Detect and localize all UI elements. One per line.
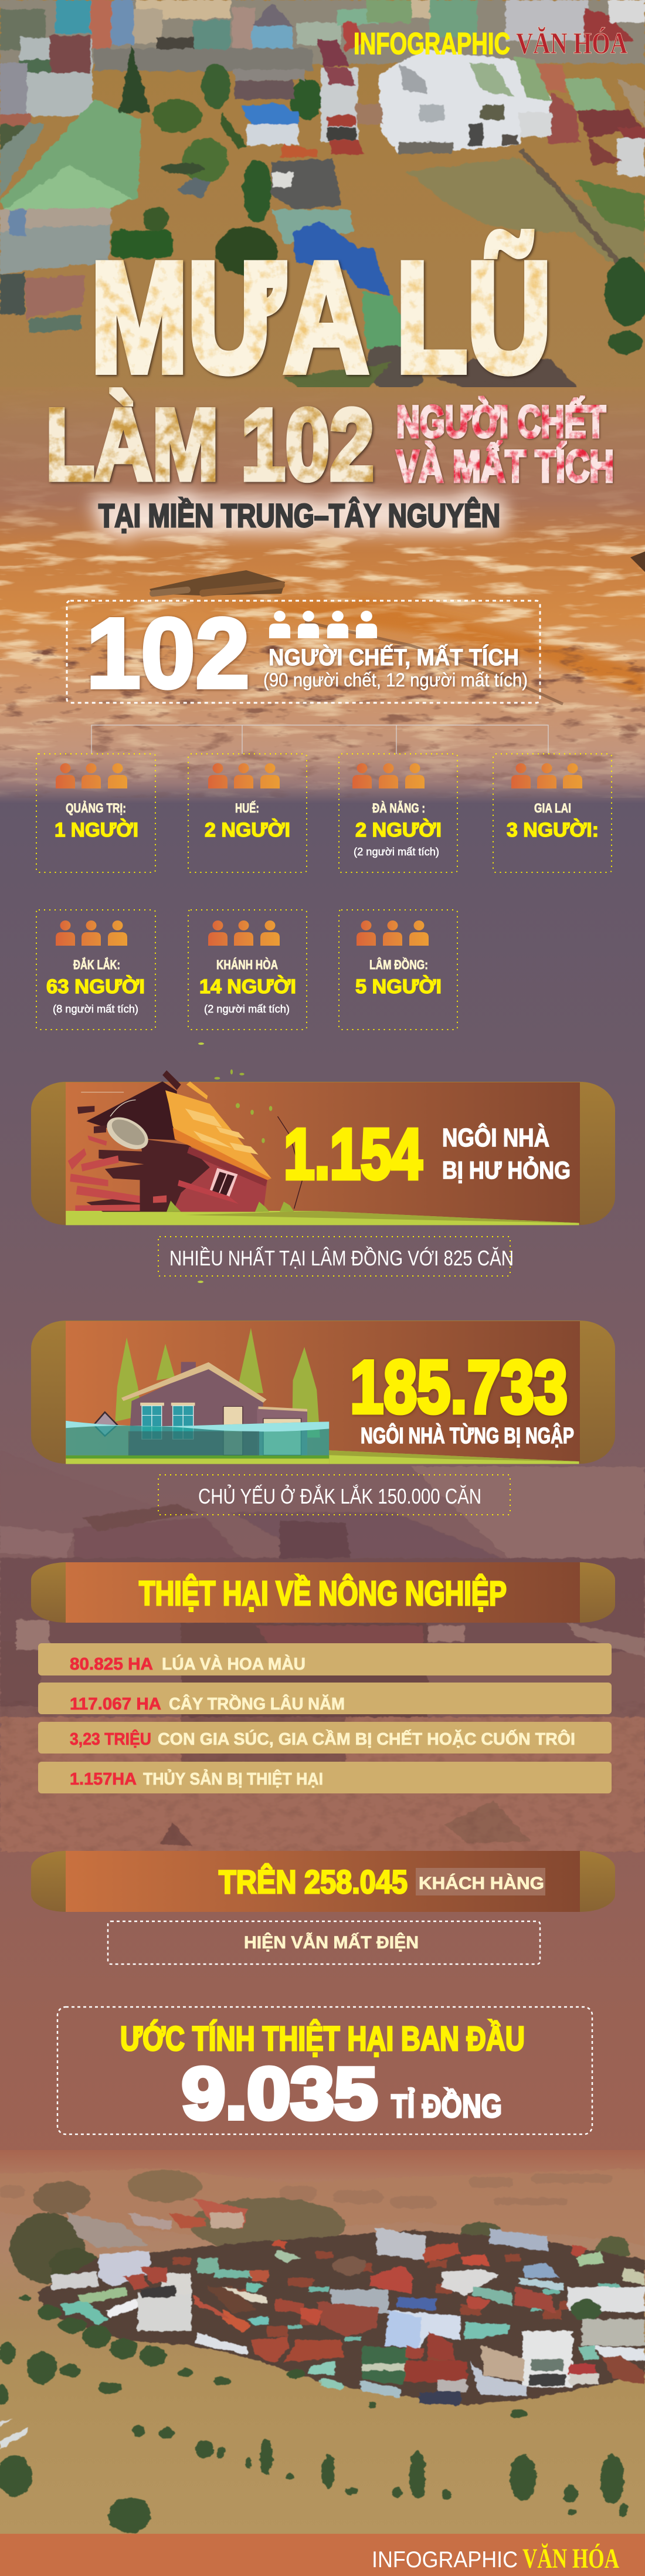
label: dead and missing: NGƯỜI CHẾT, MẤT TÍCH: [269, 644, 519, 671]
count: 14 NGƯỜI: [199, 976, 296, 998]
row: perennial trees: [38, 1683, 612, 1714]
icon: people: [208, 920, 280, 946]
icon: collapsing house: [66, 1069, 579, 1225]
row: livestock: [38, 1722, 612, 1754]
icon: people: [352, 763, 425, 788]
count: 3 NGƯỜI:: [507, 819, 599, 841]
value: 1.154: 1.154: [284, 1114, 422, 1194]
value: 185.733: 185.733: [350, 1345, 568, 1429]
count: 2 NGƯỜI: [355, 819, 442, 841]
title block: [46, 26, 627, 534]
count: 63 NGƯỜI: [46, 976, 145, 998]
callout: still without power: [108, 1921, 540, 1964]
label: customers: [416, 1868, 545, 1895]
row: perennial trees: 117.067 HA: [70, 1695, 161, 1714]
icon: people: [357, 920, 429, 946]
icon: people: [511, 763, 582, 788]
note: (2 người mất tích): [204, 1003, 290, 1015]
brand header: INFOGRAPHIC: [354, 27, 510, 61]
bottom photo: flooded village: [0, 2150, 645, 2534]
section header: agriculture damage: [31, 1562, 615, 1623]
row: aquaculture: [38, 1762, 612, 1793]
connector lines: [91, 725, 548, 754]
card: Lâm Đồng: [339, 910, 457, 1030]
row: aquaculture: THỦY SẢN BỊ THIỆT HẠI: [143, 1769, 323, 1789]
province name: ĐÀ NẴNG :: [372, 801, 425, 815]
footer brand: infographic: INFOGRAPHIC: [372, 2547, 518, 2572]
label: customers: KHÁCH HÀNG: [419, 1873, 544, 1893]
icon: people: [208, 763, 280, 788]
panel: estimated total damage: [57, 2007, 592, 2134]
icon: flooded house: [66, 1328, 579, 1464]
callout: most in Lâm Đồng: [158, 1237, 514, 1276]
card: Gia Lai: [493, 754, 612, 872]
icon: people: [56, 920, 127, 946]
province name: KHÁNH HÒA: [216, 957, 278, 972]
row: livestock: CON GIA SÚC, GIA CẦM BỊ CHẾT HOẶC CUỐN TRÔI: [158, 1729, 575, 1749]
province name: ĐẮK LẮK:: [73, 957, 120, 972]
card: Đắk Lắk: [36, 910, 155, 1030]
province name: QUẢNG TRỊ:: [66, 801, 126, 815]
icon: four people: [269, 611, 377, 638]
card: Đà Nẵng: [339, 754, 457, 872]
row: perennial trees: CÂY TRỒNG LÂU NĂM: [169, 1694, 345, 1714]
panel: flooded houses: [31, 1321, 615, 1464]
label: flooded houses: NGÔI NHÀ TỪNG BỊ NGẬP: [361, 1422, 574, 1448]
count: 1 NGƯỜI: [55, 819, 138, 841]
big number 102: 102: [86, 598, 250, 709]
card: Khánh Hòa: [188, 910, 307, 1030]
province name: GIA LAI: [534, 801, 571, 815]
row: rice and crops: LÚA VÀ HOA MÀU: [162, 1654, 305, 1674]
unit: billion dong: TỈ ĐỒNG: [391, 2087, 502, 2124]
callout: still without power: HIỆN VẪN MẤT ĐIỆN: [244, 1932, 419, 1952]
label: houses: NGÔI NHÀ: [442, 1122, 549, 1152]
callout: most in Lâm Đồng: NHIỀU NHẤT TẠI LÂM ĐỒNG VỚI 825 CĂN: [169, 1245, 514, 1270]
heading: initial estimate: ƯỚC TÍNH THIỆT HẠI BAN ĐẦU: [120, 2020, 525, 2058]
count: 5 NGƯỜI: [355, 976, 442, 998]
headline: LÀM 102: LÀM 102: [46, 388, 374, 501]
section header: agriculture damage: THIỆT HẠI VỀ NÔNG NGHIỆP: [139, 1575, 507, 1613]
row: rice and crops: [38, 1643, 612, 1675]
note: (2 người mất tích): [354, 846, 439, 858]
leaf accent: [198, 1042, 204, 1045]
subtitle: TẠI MIỀN TRUNG–TÂY NGUYÊN: [99, 497, 500, 534]
callout: mainly in Đắk Lắk: CHỦ YẾU Ở ĐẮK LẮK 150.000 CĂN: [198, 1484, 481, 1508]
callout: mainly in Đắk Lắk: [158, 1475, 510, 1515]
note: (8 người mất tích): [53, 1003, 138, 1015]
footer bar: [0, 2534, 645, 2576]
icon: people: [56, 763, 127, 788]
card: Quảng Trị: [36, 754, 155, 872]
label: damaged: BỊ HƯ HỎNG: [442, 1156, 571, 1184]
mud river background: [0, 375, 645, 804]
debris background photo: [0, 1450, 645, 1851]
province name: LÂM ĐỒNG:: [369, 957, 428, 972]
background photo: flooded town: [0, 0, 645, 1851]
row: livestock: 3,23 TRIỆU: [70, 1729, 151, 1749]
note: breakdown: (90 người chết, 12 người mất tích): [263, 669, 528, 690]
panel: total 102 dead and missing: [67, 598, 540, 709]
value: 9.035: 9.035: [182, 2053, 378, 2134]
value: 258.045: TRÊN 258.045: [219, 1863, 408, 1900]
panel: damaged houses: [31, 1069, 615, 1225]
leaf accent: [198, 1281, 203, 1283]
province name: HUẾ:: [235, 801, 259, 815]
panel: customers without power: [31, 1851, 615, 1912]
count: 2 NGƯỜI: [205, 819, 290, 841]
row: rice and crops: 80.825 HA: [70, 1655, 153, 1674]
page background gradient: [0, 763, 645, 2576]
card: Huế: [188, 754, 307, 872]
row: aquaculture: 1.157HA: [70, 1770, 137, 1789]
